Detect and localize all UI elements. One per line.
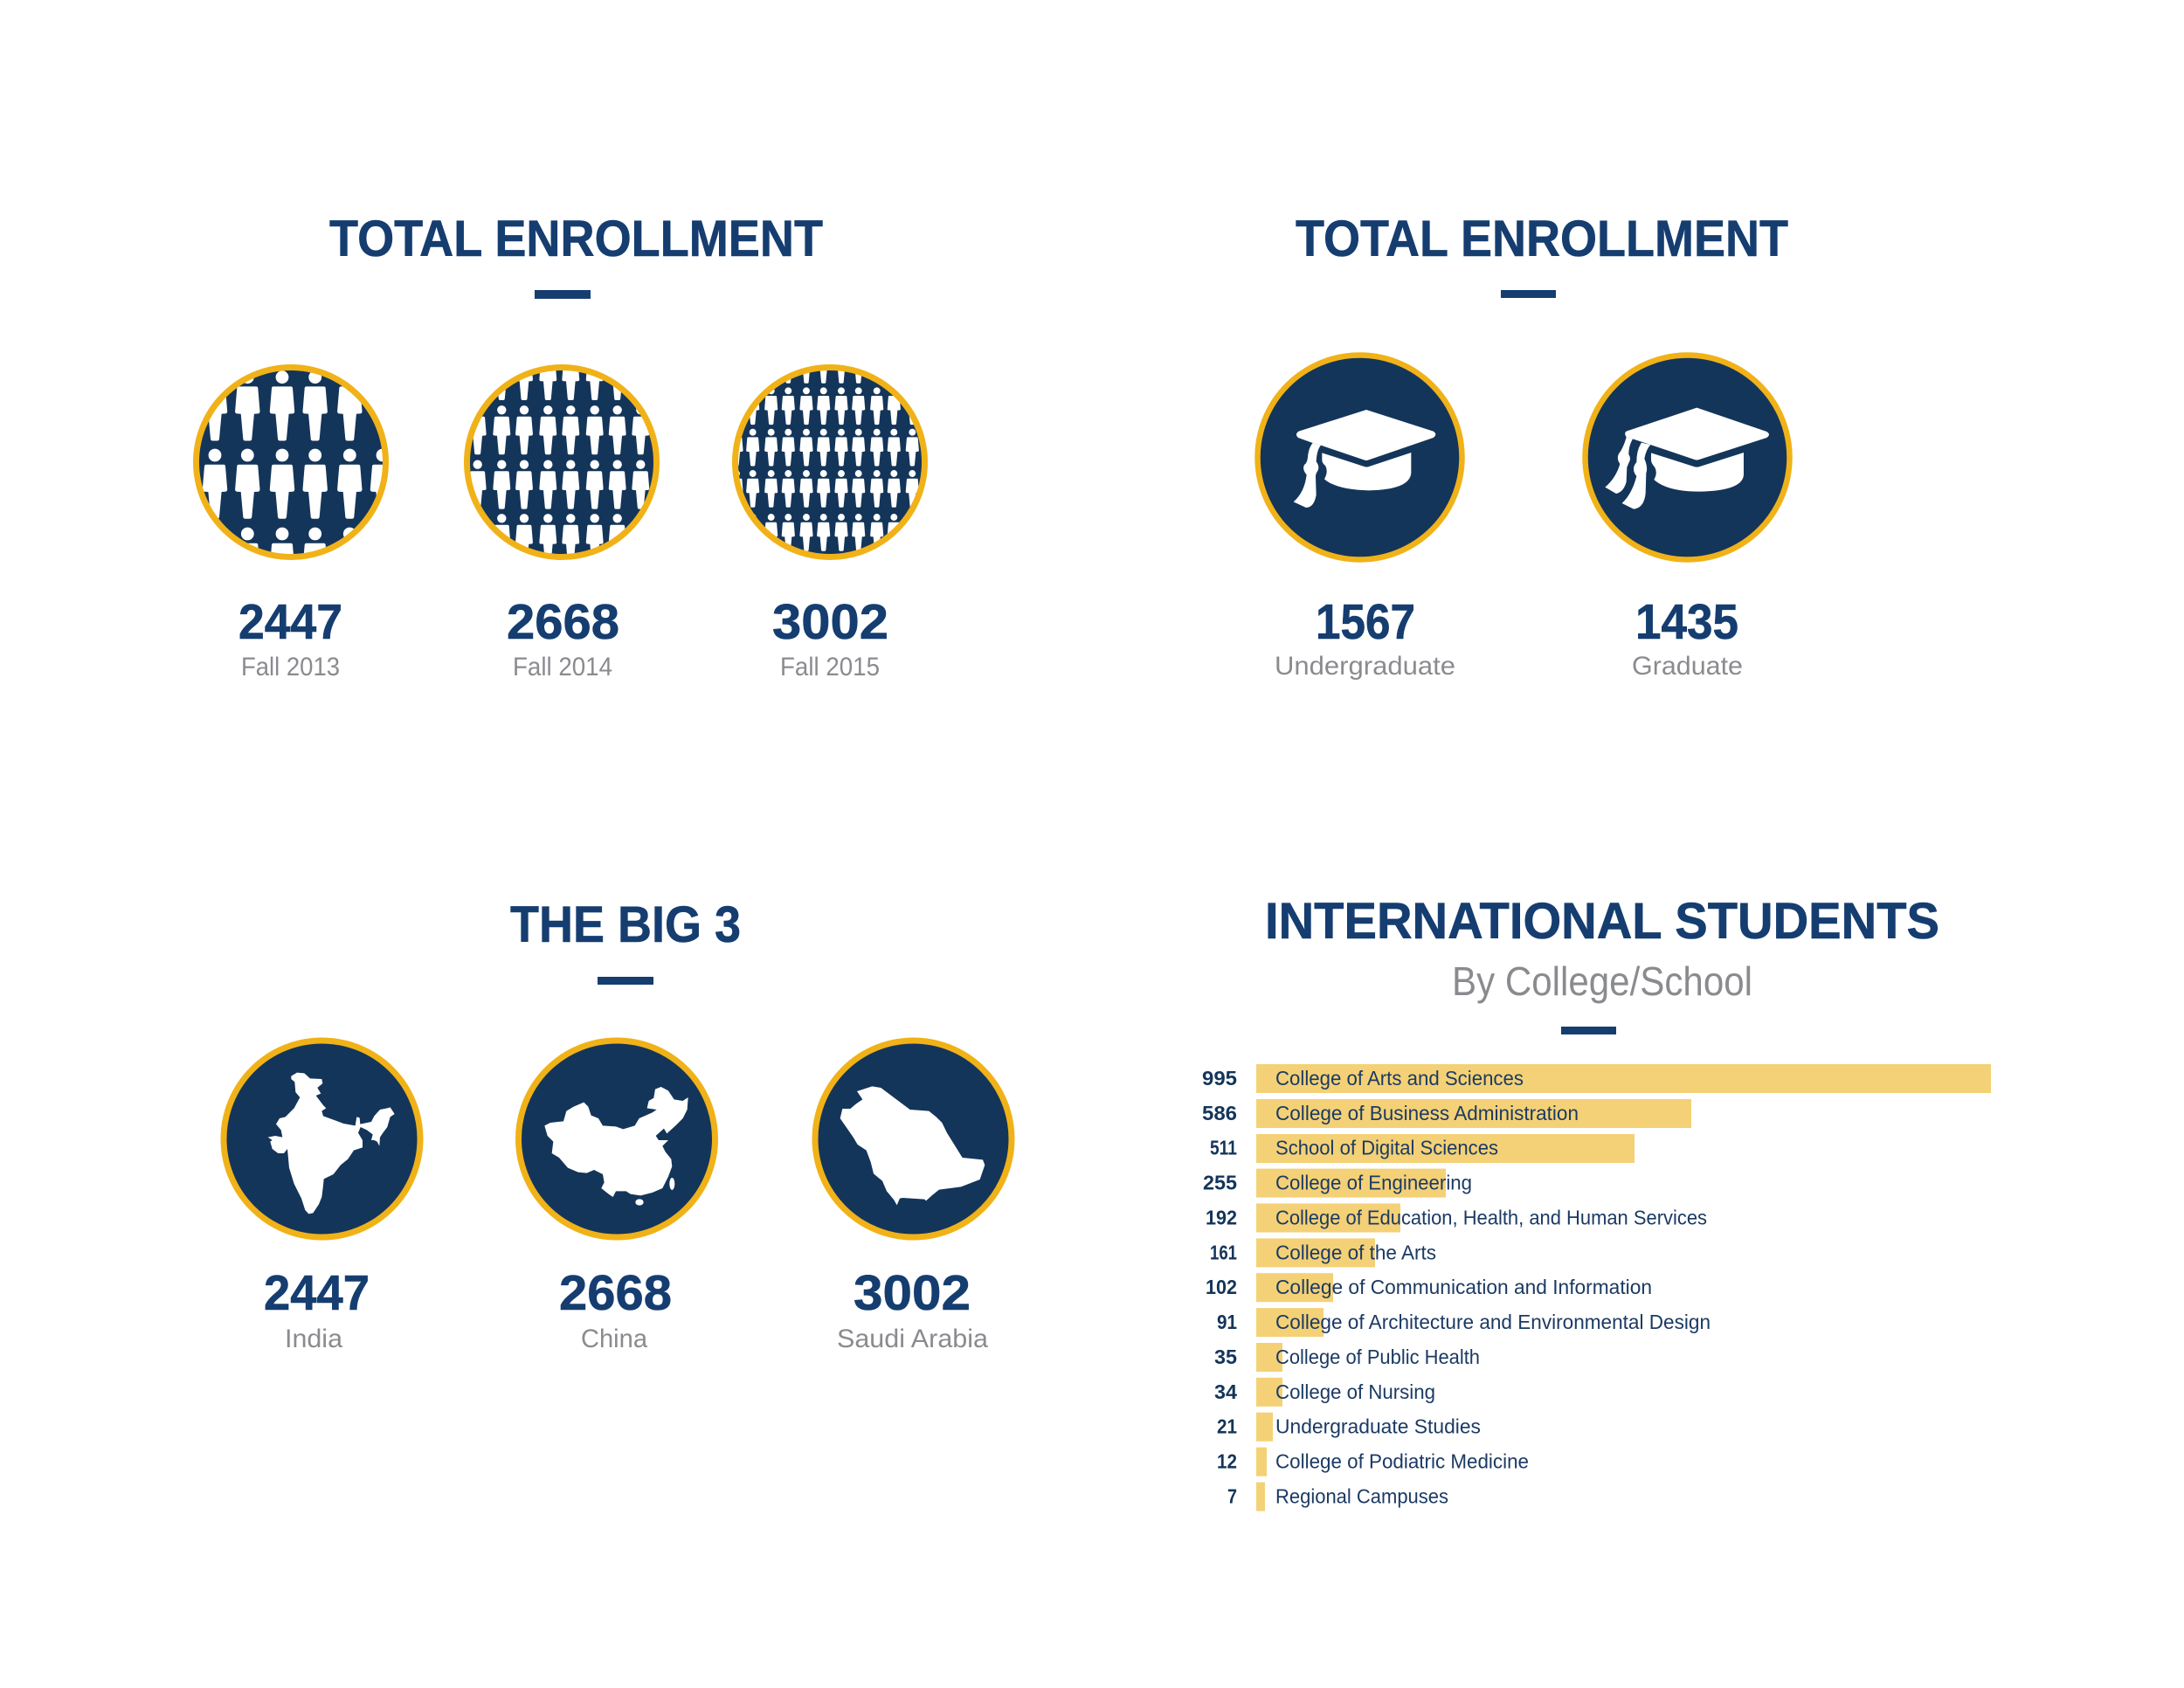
stat: 2447 india: 2447 <box>264 1265 370 1321</box>
bar chart: students by college: 192 <box>1206 1206 1237 1228</box>
heading: the big 3: THE BIG 3 <box>510 896 741 953</box>
stat: 3002 fall 2015: 3002 <box>772 594 888 650</box>
bar chart: students by college: 161 <box>1210 1241 1237 1263</box>
stat: 3002 fall 2015 <box>772 594 888 681</box>
stat: 1435 graduate <box>1632 594 1743 681</box>
icon: people circle fall 2014 <box>466 351 658 563</box>
bar chart: students by college: College of Architecture and Environmental Design <box>1275 1311 1711 1333</box>
icon: china map <box>516 1038 717 1239</box>
stat: 2447 india: India <box>285 1325 342 1353</box>
stat: 2447 fall 2013: 2447 <box>238 594 342 650</box>
bar chart: students by college: College of Education, Health, and Human Services <box>1275 1206 1707 1228</box>
bar chart: students by college: 102 <box>1206 1276 1237 1298</box>
bar chart: students by college: 511 <box>1210 1137 1237 1159</box>
bar chart: students by college: School of Digital Sciences <box>1275 1137 1498 1159</box>
bar chart: students by college: College of Engineering <box>1275 1172 1472 1194</box>
icon: graduation cap graduate <box>1585 355 1791 561</box>
bar chart: students by college: College of the Arts <box>1275 1241 1436 1263</box>
bar chart: students by college: 586 <box>1202 1102 1237 1124</box>
stat: 2668 fall 2014: 2668 <box>507 594 619 650</box>
bar chart: students by college: College of Business Administration <box>1275 1102 1579 1124</box>
bar chart: students by college: 255 <box>1203 1172 1237 1194</box>
heading: total enrollment: TOTAL ENROLLMENT <box>329 211 823 267</box>
stat: 3002 saudi arabia <box>837 1265 988 1353</box>
bar chart: students by college: 91 <box>1217 1311 1237 1333</box>
icon: graduation cap undergraduate <box>1256 355 1462 561</box>
stat: 2668 china: China <box>581 1325 647 1353</box>
stat: 2668 china <box>559 1265 672 1353</box>
stat: 1567 undergraduate: 1567 <box>1316 594 1415 650</box>
stat: 1567 undergraduate <box>1275 594 1455 681</box>
stat: 1567 undergraduate: Undergraduate <box>1275 652 1455 681</box>
bar chart: students by college: College of Nursing <box>1275 1380 1435 1403</box>
icon: india map <box>222 1038 423 1239</box>
heading: total enrollment: TOTAL ENROLLMENT <box>1296 211 1788 267</box>
bar chart: students by college: College of Public Health <box>1275 1346 1480 1368</box>
bar chart: students by college: Regional Campuses <box>1275 1485 1448 1508</box>
bar chart: students by college: College of Arts and Sciences <box>1275 1067 1524 1090</box>
bar chart: students by college: 21 <box>1217 1415 1237 1438</box>
icon: people circle fall 2013 <box>193 364 389 560</box>
stat: 2668 fall 2014: Fall 2014 <box>513 653 612 681</box>
stat: 2447 fall 2013 <box>238 594 342 681</box>
bar chart: students by college <box>1202 1064 1991 1512</box>
panel: total enrollment by year <box>195 211 926 681</box>
bar chart: students by college: Undergraduate Studies <box>1275 1415 1481 1438</box>
panel: international students <box>1202 893 1991 1512</box>
stat: 3002 saudi arabia: 3002 <box>854 1265 971 1321</box>
stat: 2668 china: 2668 <box>559 1265 672 1321</box>
stat: 2668 fall 2014 <box>507 594 619 681</box>
stat: 2447 india <box>264 1265 370 1353</box>
subheading: by college/school: By College/School <box>1452 958 1752 1004</box>
icon: people circle fall 2015 <box>729 346 926 558</box>
stat: 1435 graduate: Graduate <box>1632 652 1743 681</box>
stat: 2447 fall 2013: Fall 2013 <box>241 653 340 681</box>
bar chart: students by college: College of Communication and Information <box>1275 1276 1652 1298</box>
panel: total enrollment by level <box>1256 211 1791 681</box>
panel: the big 3 <box>222 896 1013 1353</box>
bar chart: students by college: 34 <box>1214 1380 1237 1403</box>
stat: 1435 graduate: 1435 <box>1635 594 1738 650</box>
bar chart: students by college: 12 <box>1217 1450 1237 1473</box>
bar chart: students by college: 35 <box>1214 1346 1237 1368</box>
bar chart: students by college: 7 <box>1227 1485 1237 1508</box>
icon: saudi arabia map <box>812 1038 1013 1239</box>
bar chart: students by college: College of Podiatric Medicine <box>1275 1450 1529 1473</box>
stat: 3002 saudi arabia: Saudi Arabia <box>837 1325 988 1353</box>
stat: 3002 fall 2015: Fall 2015 <box>780 653 880 681</box>
bar chart: students by college: 995 <box>1202 1067 1237 1090</box>
heading: international students: INTERNATIONAL STUDENTS <box>1265 893 1939 950</box>
